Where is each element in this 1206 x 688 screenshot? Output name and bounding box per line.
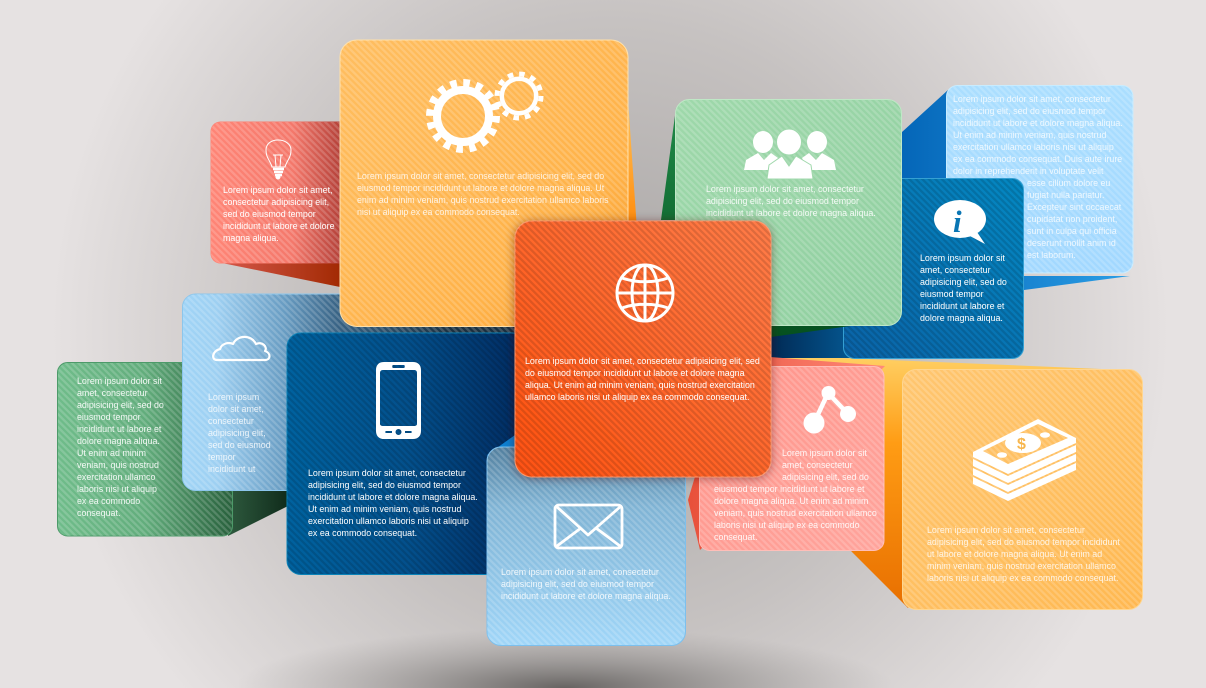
- text: cloud: Lorem ipsum: [208, 392, 259, 402]
- icon: info bubble: i: [953, 204, 962, 239]
- panel: money: [772, 355, 1142, 610]
- text: phone: incididunt ut labore et dolore magna aliqua.: [308, 492, 478, 502]
- text: left green: [77, 376, 164, 518]
- text: globe: Lorem ipsum dolor sit amet, consectetur adipisicing elit, sed: [525, 356, 760, 366]
- text: cloud: dolor sit amet,: [208, 404, 264, 414]
- text: team: adipisicing elit, sed do eiusmod tempor: [706, 196, 859, 206]
- text: money: minim veniam, quis nostrud exercitation ullamco: [927, 561, 1116, 571]
- text: gears: [357, 171, 609, 217]
- text: bulb: magna aliqua.: [223, 233, 279, 243]
- text: gears: Lorem ipsum dolor sit amet, consectetur adipisicing elit, sed do: [357, 171, 604, 181]
- card: molecule: [700, 366, 884, 550]
- side wedge: left green: [228, 480, 290, 536]
- icon: globe: [617, 265, 673, 321]
- text: molecule: consequat.: [714, 532, 757, 542]
- text: left green: dolore magna aliqua.: [77, 436, 160, 446]
- text: left green: eiusmod tempor: [77, 412, 141, 422]
- text: mail: incididunt ut labore et dolore magna aliqua.: [501, 591, 671, 601]
- side wedge: bulb: [222, 255, 345, 288]
- text: sky blue: exercitation ullamco laboris nisi ut aliquip: [953, 142, 1114, 152]
- panel: left green: [58, 362, 290, 536]
- text: sky blue: adipisicing elit, sed do eiusmod tempor: [953, 106, 1106, 116]
- side wedge: sky blue: [902, 90, 1130, 290]
- card: team: [676, 100, 902, 326]
- text: info: eiusmod tempor: [920, 289, 984, 299]
- text: left green: amet, consectetur: [77, 388, 148, 398]
- side wedge: molecule: [688, 355, 885, 550]
- text: molecule: Lorem ipsum dolor sit: [782, 448, 867, 458]
- text: sky blue: Lorem ipsum dolor sit amet, consectetur: [953, 94, 1111, 104]
- panel: gears: [210, 40, 637, 326]
- text: gears: nisi ut aliquip ex ea commodo consequat.: [357, 207, 520, 217]
- icon: people: [744, 129, 836, 179]
- text: sky blue: ex ea commodo consequat. Duis aute irure: [953, 154, 1122, 164]
- text: info: Lorem ipsum dolor sit: [920, 253, 1005, 263]
- icon: bulb: [266, 140, 291, 179]
- panel: mail: [487, 435, 686, 646]
- text: molecule: amet, consectetur: [782, 460, 853, 470]
- text: info: incididunt ut labore et: [920, 301, 1005, 311]
- panel: molecule: [688, 355, 885, 550]
- card: money: [902, 370, 1142, 610]
- text: phone: exercitation ullamco laboris nisi ut aliquip: [308, 516, 469, 526]
- text: cloud: adipisicing elit,: [208, 428, 266, 438]
- card: phone: [287, 333, 527, 574]
- icon: cloud: [213, 337, 270, 360]
- icon: phone: [376, 362, 421, 439]
- side wedge: mail: [487, 435, 515, 470]
- text: team: [706, 184, 876, 218]
- text: team: Lorem ipsum dolor sit amet, consectetur: [706, 184, 864, 194]
- side wedge: info: [771, 326, 850, 358]
- text: globe: aliqua. Ut enim ad minim veniam, quis nostrud exercitation: [525, 380, 755, 390]
- text: money: laboris nisi ut aliquip ex ea commodo consequat.: [927, 573, 1118, 583]
- text: molecule: [714, 448, 877, 542]
- text: sky blue: dolor in reprehenderit in voluptate velit: [953, 166, 1104, 176]
- text: sky blue: [953, 94, 1123, 260]
- text: globe: do eiusmod tempor incididunt ut labore et dolore magna: [525, 368, 745, 378]
- icon: info bubble: [934, 200, 986, 244]
- icon: banknotes: [973, 419, 1076, 501]
- panel: cloud: [182, 294, 522, 490]
- card: left green: [58, 362, 232, 536]
- card: sky blue: [946, 86, 1133, 273]
- text: cloud: consectetur: [208, 416, 254, 426]
- floor shadow: [235, 628, 895, 688]
- icon: banknotes: $: [1017, 436, 1026, 453]
- text: cloud: sed do eiusmod: [208, 440, 271, 450]
- text: phone: adipisicing elit, sed do eiusmod tempor: [308, 480, 461, 490]
- text: phone: Lorem ipsum dolor sit amet, consectetur: [308, 468, 466, 478]
- text: cloud: incididunt ut: [208, 464, 256, 474]
- text: sky blue: est laborum.: [1027, 250, 1076, 260]
- text: molecule: veniam, quis nostrud exercitation ullamco: [714, 508, 877, 518]
- text: mail: Lorem ipsum dolor sit amet, consectetur: [501, 567, 659, 577]
- text: sky blue: fugiat nulla pariatur.: [1027, 190, 1104, 200]
- side wedge: team: [661, 108, 850, 337]
- text: phone: ex ea commodo consequat.: [308, 528, 417, 538]
- text: left green: ex ea commodo: [77, 496, 140, 506]
- text: cloud: [208, 392, 271, 474]
- text: molecule: laboris nisi ut aliquip ex ea commodo: [714, 520, 860, 530]
- side wedge: gears: [610, 70, 637, 230]
- text: molecule: eiusmod tempor incididunt ut labore et: [714, 484, 865, 494]
- text: mail: adipisicing elit, sed do eiusmod tempor: [501, 579, 654, 589]
- text: globe: ullamco laboris nisi ut aliquip ex ea commodo consequat.: [525, 392, 749, 402]
- icon: gears: [430, 74, 541, 149]
- text: team: incididunt ut labore et dolore magna aliqua.: [706, 208, 876, 218]
- text: left green: veniam, quis nostrud: [77, 460, 159, 470]
- text: left green: consequat.: [77, 508, 120, 518]
- text: phone: Ut enim ad minim veniam, quis nostrud: [308, 504, 461, 514]
- card: cloud: [182, 294, 522, 490]
- text: sky blue: deserunt mollit anim id: [1027, 238, 1116, 248]
- text: bulb: [223, 185, 335, 243]
- text: sky blue: incididunt ut labore et dolore magna aliqua.: [953, 118, 1123, 128]
- text: left green: Ut enim ad minim: [77, 448, 146, 458]
- panel: info: [771, 178, 1024, 358]
- text: info: amet, consectetur: [920, 265, 991, 275]
- text: bulb: sed do eiusmod tempor: [223, 209, 316, 219]
- text: left green: incididunt ut labore et: [77, 424, 162, 434]
- card: info: [844, 178, 1024, 358]
- text: gears: eiusmod tempor incididunt ut labore et dolore magna aliqua. Ut: [357, 183, 605, 193]
- card: globe: [515, 221, 771, 477]
- text: left green: Lorem ipsum dolor sit: [77, 376, 162, 386]
- panel: sky blue text block: [902, 86, 1133, 290]
- panel: team: [661, 100, 902, 337]
- card: bulb: [210, 122, 360, 264]
- text: molecule: adipisicing elit, sed do: [782, 472, 869, 482]
- text: left green: laboris nisi ut aliquip: [77, 484, 157, 494]
- icon: envelope: [555, 505, 622, 548]
- text: gears: enim ad minim veniam, quis nostrud exercitation ullamco laboris: [357, 195, 609, 205]
- text: globe: [525, 356, 760, 402]
- side wedge: money: [772, 355, 1130, 608]
- text: sky blue: Ut enim ad minim veniam, quis nostrud: [953, 130, 1106, 140]
- text: molecule: dolore magna aliqua. Ut enim ad minim: [714, 496, 868, 506]
- text: sky blue: Excepteur sint occaecat: [1027, 202, 1122, 212]
- text: bulb: incididunt ut labore et dolore: [223, 221, 335, 231]
- text: sky blue: cupidatat non proident,: [1027, 214, 1117, 224]
- text: phone: [308, 468, 478, 538]
- text: money: Lorem ipsum dolor sit amet, consectetur: [927, 525, 1085, 535]
- text: left green: exercitation ullamco: [77, 472, 155, 482]
- icon: molecule: [804, 386, 856, 434]
- text: money: adipisicing elit, sed do eiusmod tempor incididunt: [927, 537, 1120, 547]
- panel: globe: [515, 221, 771, 477]
- text: mail: [501, 567, 671, 601]
- text: money: ut labore et dolore magna aliqua. Ut enim ad: [927, 549, 1102, 559]
- text: cloud: tempor: [208, 452, 236, 462]
- card: mail: [487, 447, 686, 646]
- text: money: [927, 525, 1120, 583]
- text: bulb: Lorem ipsum dolor sit amet,: [223, 185, 332, 195]
- panel: phone: [287, 333, 527, 574]
- text: info: adipisicing elit, sed do: [920, 277, 1007, 287]
- text: left green: adipisicing elit, sed do: [77, 400, 164, 410]
- text: sky blue: esse cillum dolore eu: [1027, 178, 1110, 188]
- text: info: [920, 253, 1007, 323]
- text: info: dolore magna aliqua.: [920, 313, 1003, 323]
- text: sky blue: sunt in culpa qui officia: [1027, 226, 1117, 236]
- card: gears: [340, 40, 628, 326]
- text: bulb: consectetur adipisicing elit,: [223, 197, 329, 207]
